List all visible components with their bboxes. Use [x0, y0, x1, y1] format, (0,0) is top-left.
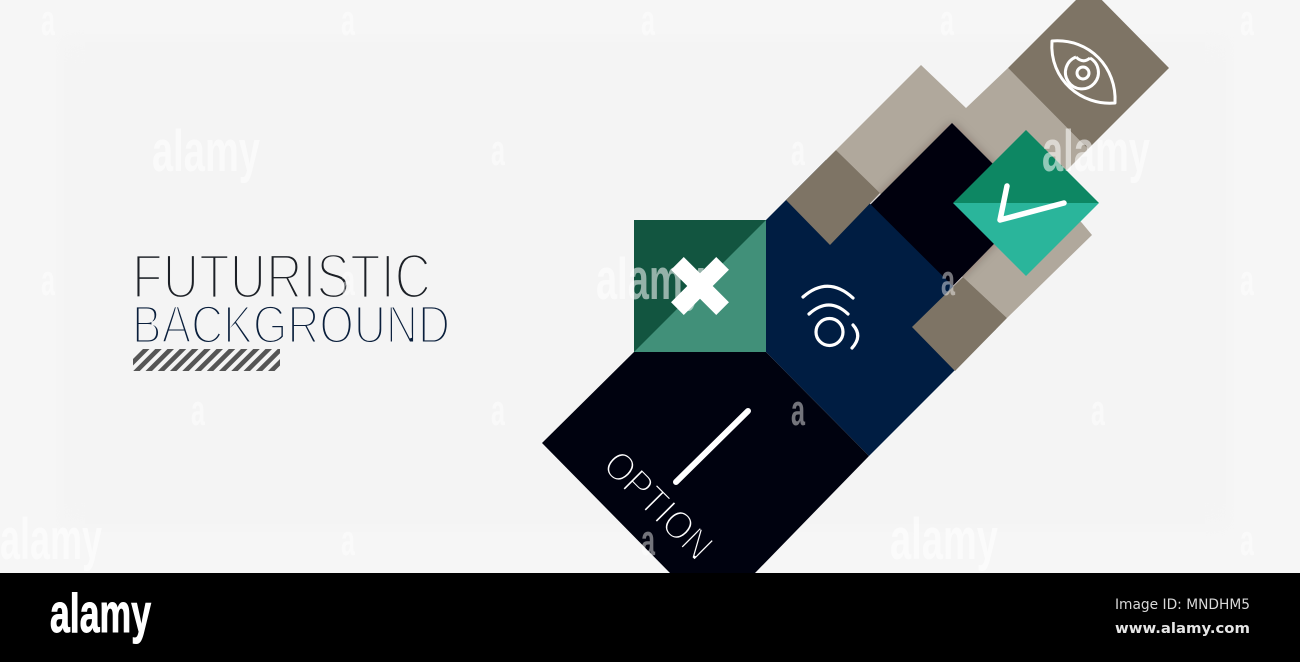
- watermarks: alamy: [1042, 119, 1150, 184]
- icon: eye: [1052, 41, 1115, 103]
- panel: option tile: [542, 352, 869, 573]
- watermarks: a: [491, 126, 505, 175]
- panel: lower light taupe band: [962, 222, 1092, 318]
- watermarks: a: [191, 386, 205, 435]
- panel: lower taupe tile: [912, 277, 1007, 371]
- footer logo: alamy: [50, 582, 151, 644]
- watermarks: a: [41, 256, 55, 305]
- icon: cross: [677, 263, 723, 309]
- watermarks: a: [1240, 516, 1254, 565]
- panel: check tile: [953, 130, 1099, 276]
- panel: upper light taupe band: [836, 65, 1088, 194]
- title line: futuristic: FUTURISTIC: [132, 242, 431, 312]
- footer bar: [0, 573, 1300, 662]
- watermarks: alamy: [0, 507, 102, 572]
- icon: slash: [676, 411, 748, 482]
- watermarks: a: [341, 256, 355, 305]
- panel: navy tile: [766, 160, 996, 456]
- watermarks: alamy: [890, 507, 998, 572]
- icon: concentric waves: [803, 286, 858, 348]
- panel: black tile: [870, 122, 997, 286]
- image id: Image ID: MNDHM5: [1115, 597, 1250, 613]
- icon: check mark: [1000, 186, 1064, 220]
- watermarks: alamy: [596, 247, 704, 312]
- option label: OPTION: [595, 442, 721, 569]
- watermarks: a: [341, 516, 355, 565]
- watermarks: a: [941, 256, 955, 305]
- watermarks: a: [491, 386, 505, 435]
- watermarks: a: [1240, 256, 1254, 305]
- geometric composition: [542, 0, 1169, 573]
- hatched bar: [133, 349, 280, 371]
- panel: eye tile: [1008, 0, 1169, 149]
- title: [133, 255, 447, 371]
- website: www.alamy.com: [1115, 621, 1250, 637]
- watermarks: a: [641, 516, 655, 565]
- title line: background: BACKGROUND: [132, 296, 450, 355]
- watermarks: alamy: [152, 119, 260, 184]
- panel: small taupe tile: [786, 150, 880, 245]
- panel: cross tile: [634, 220, 766, 352]
- watermarks: a: [791, 126, 805, 175]
- watermarks: a: [791, 386, 805, 435]
- watermarks: a: [1091, 386, 1105, 435]
